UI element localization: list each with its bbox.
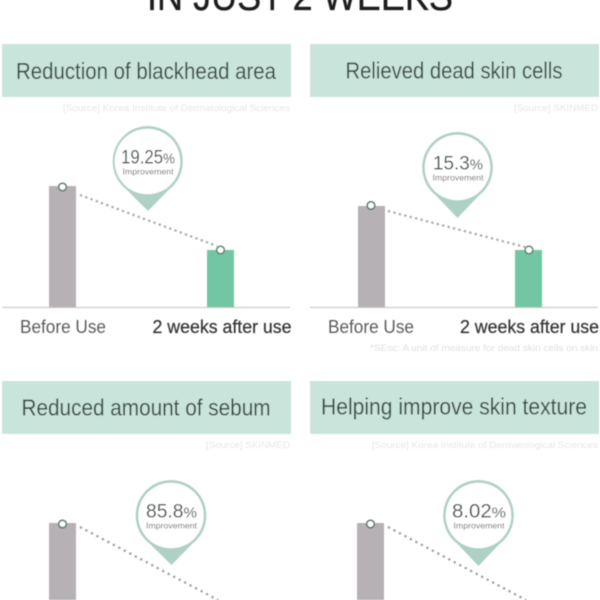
heading: dead skin cells <box>310 44 599 97</box>
bar chart <box>2 183 292 337</box>
panel: skin texture <box>310 381 599 600</box>
callout: 8.02%: Improvement <box>454 520 505 530</box>
heading: amount of sebum <box>2 381 291 434</box>
heading: skin texture <box>310 381 599 434</box>
callout: 19.25%: Improvement <box>122 166 174 176</box>
callout: 8.02% <box>443 480 514 566</box>
source note: [Source] Korea Institute of Dermatological Sciences <box>372 440 599 450</box>
callout: 19.25% <box>113 126 183 211</box>
source note: [Source] SKINMED <box>206 440 291 450</box>
heading: amount of sebum: Reduced amount of sebum <box>22 394 270 420</box>
bar chart: 2 weeks after use <box>152 317 292 337</box>
callout: 15.3%: Improvement <box>432 172 484 182</box>
bar chart: Before Use <box>328 317 414 337</box>
panel: amount of sebum <box>2 381 291 600</box>
bar chart: Before Use <box>20 317 106 337</box>
callout: 8.02%: 8.02% <box>452 502 506 522</box>
source note: [Source] Korea Institute of Dermatological Sciences <box>63 103 291 113</box>
bar chart: *SEsc: A unit of measure for dead skin cells on skin <box>370 343 598 353</box>
callout: 85.8%: 85.8% <box>146 502 197 522</box>
heading: blackhead area: Reduction of blackhead area <box>16 58 276 84</box>
panel: blackhead area <box>2 44 292 337</box>
bar chart <box>310 202 599 353</box>
source note: [Source] SKINMED <box>514 103 599 113</box>
heading: dead skin cells: Relieved dead skin cells <box>346 58 562 84</box>
heading: blackhead area <box>2 44 291 97</box>
callout: 15.3%: 15.3% <box>433 154 483 174</box>
bar chart <box>49 520 218 600</box>
callout: 19.25%: 19.25% <box>121 148 175 168</box>
bar chart <box>357 520 526 600</box>
panel: dead skin cells <box>310 44 599 353</box>
bar chart: 2 weeks after use <box>460 317 599 337</box>
callout: 85.8% <box>136 480 206 565</box>
callout: 15.3% <box>422 132 493 218</box>
callout: 85.8%: Improvement <box>146 520 198 530</box>
